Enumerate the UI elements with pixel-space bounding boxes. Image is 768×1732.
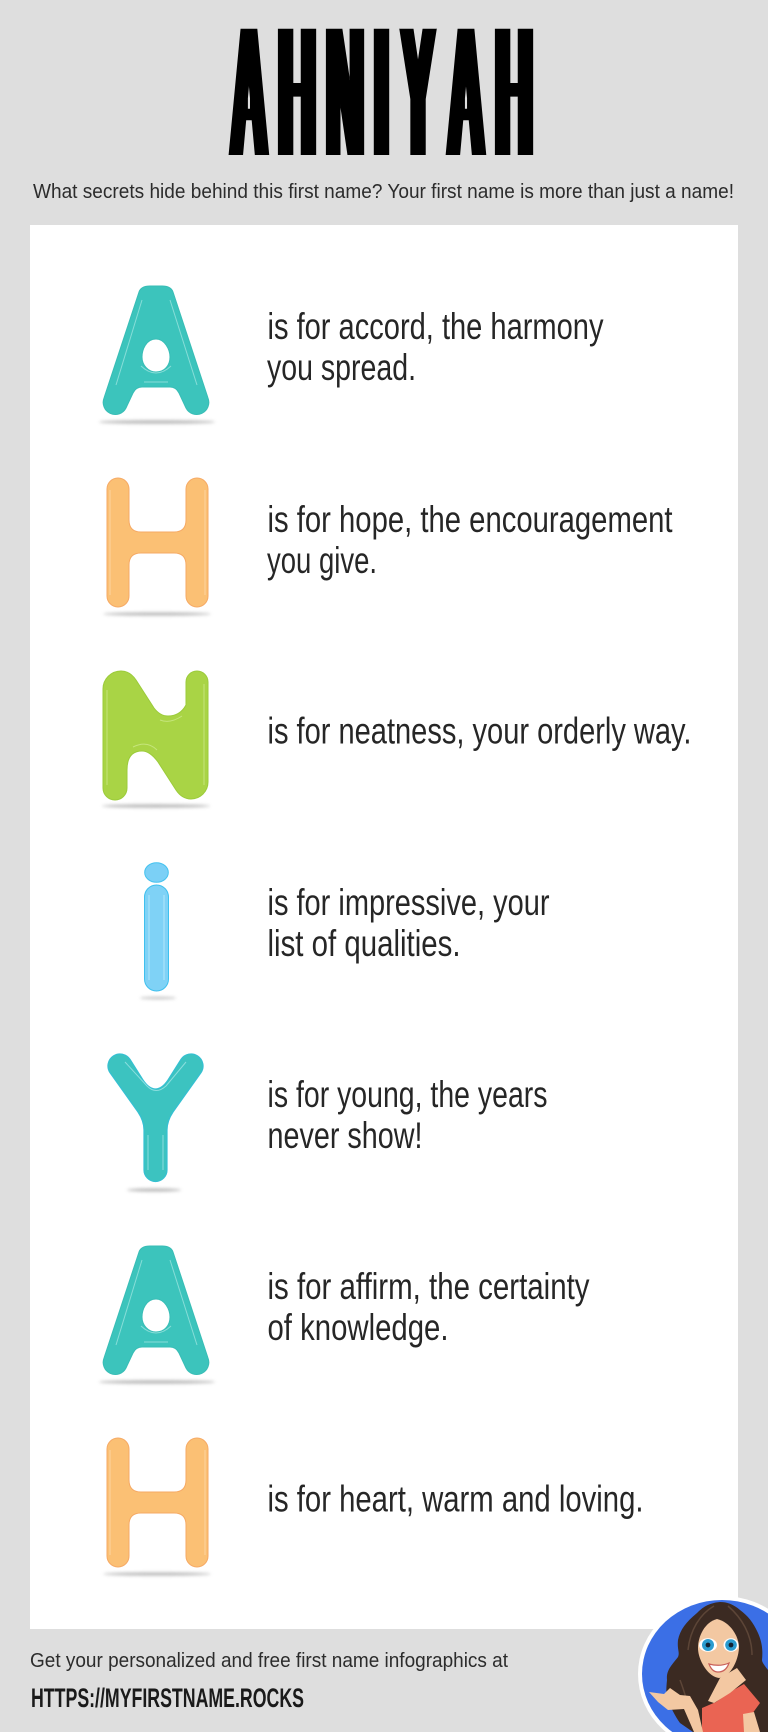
text: accord: you spread.: [267, 347, 416, 388]
row: letter i impressive: [140, 863, 550, 999]
text: accord: is for accord, the harmony: [268, 306, 604, 347]
eyes: [699, 1638, 738, 1652]
row: letter A affirm: [99, 1246, 590, 1384]
text: heart: is for heart, warm and loving.: [268, 1478, 644, 1520]
hair highlights: [680, 1606, 752, 1722]
avatar: woman in circle: [638, 1596, 768, 1732]
icon: letter A: [99, 286, 215, 424]
row: letter Y young: [108, 1054, 547, 1192]
text: affirm: is for affirm, the certainty: [268, 1266, 590, 1307]
footer text: Get your personalized and free first name infographics at: [30, 1650, 508, 1672]
face: [698, 1619, 739, 1678]
row: letter A accord: [99, 286, 604, 424]
text: young: never show!: [268, 1115, 422, 1156]
subtitle: What secrets hide behind this first name? Your first name is more than just a name!: [33, 181, 734, 203]
panel: letter meanings: [30, 225, 738, 1629]
text: hope: you give.: [267, 540, 377, 581]
other arm: [743, 1712, 760, 1732]
text: affirm: [268, 1266, 590, 1348]
text: impressive: list of qualities.: [268, 923, 460, 964]
neck: [708, 1668, 746, 1703]
text: hope: is for hope, the encouragement: [268, 499, 673, 540]
icon: letter H: [103, 478, 211, 616]
shirt: [702, 1684, 760, 1732]
hand and arm: [649, 1688, 703, 1732]
text: accord: [267, 306, 604, 388]
text: young: is for young, the years: [268, 1074, 548, 1115]
icon: letter Y: [108, 1054, 203, 1192]
row: letter H heart: [103, 1438, 644, 1576]
icon: letter i: [140, 863, 176, 999]
text: young: [268, 1074, 548, 1156]
row: letter H hope: [103, 478, 673, 616]
icon: letter H: [103, 1438, 211, 1576]
icon: letter N: [102, 671, 210, 808]
footer url: HTTPS://MYFIRSTNAME.ROCKS: [31, 1683, 304, 1713]
hair: [666, 1602, 768, 1732]
icon: letter A: [99, 1246, 215, 1384]
row: letter N neatness: [102, 671, 692, 808]
text: hope: [267, 499, 673, 581]
text: impressive: is for impressive, your: [268, 882, 550, 923]
text: affirm: of knowledge.: [268, 1307, 448, 1348]
mouth: [709, 1663, 729, 1672]
text: impressive: [268, 882, 550, 964]
